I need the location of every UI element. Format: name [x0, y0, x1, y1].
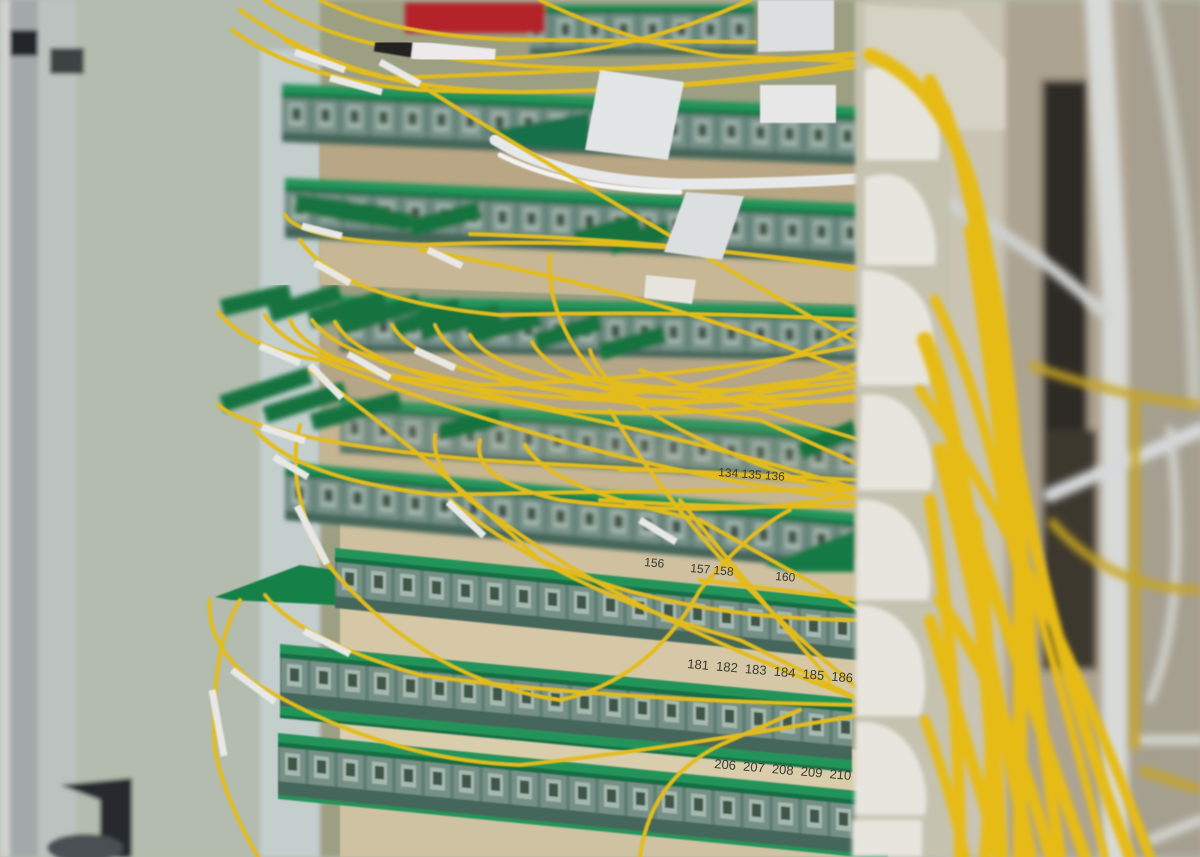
row 2	[282, 84, 862, 165]
port numbers	[644, 465, 854, 783]
row 4	[222, 292, 860, 361]
yellow fibres mid layer	[210, 0, 870, 857]
paper labels	[585, 0, 836, 304]
row 6	[285, 462, 855, 572]
numbers row 181-186: 181 182 183 184 185 186	[687, 656, 854, 685]
numbers row 156-160: 156	[644, 555, 665, 571]
row 9	[278, 733, 888, 857]
white fibre through top	[495, 140, 870, 192]
fibre tags	[212, 52, 676, 756]
numbers row 134-136: 134 135 136	[718, 465, 786, 484]
black heat shrink tag with white sleeve	[375, 44, 495, 58]
row 8	[280, 644, 852, 772]
row 1	[405, 3, 755, 55]
panel body	[260, 0, 865, 857]
numbers row 205-210: 206 207 208 209 210	[714, 756, 852, 783]
port numbers: 160	[775, 569, 796, 585]
label middle	[664, 192, 744, 260]
background white cables	[935, 0, 1200, 857]
port numbers: 157 158	[690, 561, 734, 579]
label top right	[758, 0, 834, 52]
row 5	[222, 375, 860, 484]
left door frame	[0, 0, 260, 857]
row 3	[285, 178, 862, 264]
connector rows	[215, 3, 888, 857]
background yellow strands right	[1030, 365, 1200, 790]
label centre	[585, 70, 684, 160]
front blurred yellow fibre bundle	[870, 55, 1150, 857]
row 7	[215, 548, 860, 660]
white clips column	[852, 0, 1005, 857]
right side background	[945, 0, 1200, 857]
tan label strips	[320, 135, 865, 857]
